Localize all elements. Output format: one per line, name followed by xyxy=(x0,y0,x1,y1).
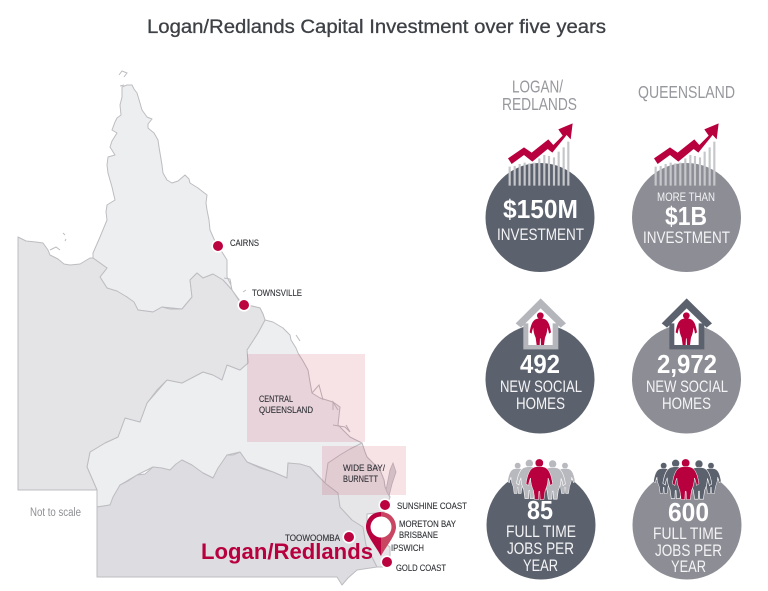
region: south west Queensland xyxy=(97,452,377,585)
column heading: Logan/Redlands: REDLANDS xyxy=(502,94,577,114)
location pin: Logan/Redlands xyxy=(366,512,396,556)
Fraser Island xyxy=(386,463,396,496)
note: not to scale: Not to scale xyxy=(30,507,81,519)
marker: Townsville xyxy=(238,288,302,311)
icon: house with person xyxy=(516,298,566,349)
caption: JOBS PER xyxy=(655,542,722,560)
stat: Queensland jobs xyxy=(632,459,742,580)
circle xyxy=(486,324,594,434)
stat: Logan/Redlands investment xyxy=(486,123,594,272)
circle xyxy=(632,163,741,272)
caption: JOBS PER xyxy=(507,540,574,558)
label: Central Queensland xyxy=(259,394,313,416)
circle xyxy=(486,163,594,272)
caption: YEAR xyxy=(523,557,558,575)
stat: Logan/Redlands jobs xyxy=(486,459,596,580)
label: Central Queensland: QUEENSLAND xyxy=(259,405,313,416)
label: Wide Bay/Burnett: BURNETT xyxy=(343,474,378,485)
circle xyxy=(486,470,596,580)
column heading: Queensland: QUEENSLAND xyxy=(638,82,735,102)
icon: group of people xyxy=(654,459,721,500)
column heading: Logan/Redlands: LOGAN/ xyxy=(512,76,563,96)
value: $150M xyxy=(503,196,578,224)
caption xyxy=(653,525,723,576)
marker: Cairns xyxy=(212,238,259,252)
caption: INVESTMENT xyxy=(643,229,730,247)
marker: Sunshine Coast xyxy=(379,499,467,512)
label: Central Queensland: CENTRAL xyxy=(259,394,293,405)
label: Moreton Bay, Brisbane, Ipswich: MORETON BAY xyxy=(399,519,457,530)
highlight: Wide Bay/Burnett area xyxy=(322,446,406,495)
stat: Queensland social homes xyxy=(632,298,741,434)
map of Queensland xyxy=(18,71,467,585)
caption: HOMES xyxy=(662,395,711,413)
label: Logan/Redlands: Logan/Redlands xyxy=(201,539,373,564)
caption: FULL TIME xyxy=(506,523,576,541)
label: Wide Bay/Burnett xyxy=(343,463,385,485)
qualifier: MORE THAN xyxy=(657,192,715,204)
marker: Toowoomba: TOOWOOMBA xyxy=(285,533,341,544)
circle xyxy=(632,324,741,434)
marker: Cairns: CAIRNS xyxy=(230,238,259,249)
stat: Logan/Redlands social homes xyxy=(486,298,594,434)
value: 492 xyxy=(520,351,560,379)
caption: NEW SOCIAL xyxy=(500,378,582,396)
caption: YEAR xyxy=(671,558,706,576)
icon: house with person xyxy=(662,298,712,349)
title: Logan/Redlands Capital Investment over five years xyxy=(147,17,606,38)
caption xyxy=(506,523,576,575)
marker: Sunshine Coast: SUNSHINE COAST xyxy=(397,501,467,512)
label: Moreton Bay, Brisbane, Ipswich xyxy=(391,519,457,554)
highlight: Central Queensland area xyxy=(247,354,365,442)
caption: FULL TIME xyxy=(653,525,723,543)
column heading: Logan/Redlands xyxy=(502,76,577,114)
marker: Townsville: TOWNSVILLE xyxy=(252,288,302,299)
region: northern Queensland xyxy=(87,85,390,527)
caption xyxy=(646,378,728,413)
caption xyxy=(500,378,582,413)
stat: Queensland investment xyxy=(632,123,741,272)
value: 600 xyxy=(668,499,709,527)
icon: rising bar chart with arrow xyxy=(508,123,573,186)
value: 85 xyxy=(527,497,553,525)
region: north west Queensland xyxy=(18,237,265,490)
caption: HOMES xyxy=(516,395,565,413)
label: Moreton Bay, Brisbane, Ipswich: IPSWICH xyxy=(391,543,424,554)
small coastal islands xyxy=(50,71,350,432)
label: Wide Bay/Burnett: WIDE BAY/ xyxy=(343,463,385,474)
icon: group of people xyxy=(508,459,575,500)
value: 2,972 xyxy=(657,351,717,379)
value: $1B xyxy=(665,203,707,231)
label: Moreton Bay, Brisbane, Ipswich: BRISBANE xyxy=(399,530,438,541)
marker: Gold Coast: GOLD COAST xyxy=(396,563,446,574)
marker: Gold Coast xyxy=(381,556,446,574)
caption: INVESTMENT xyxy=(497,226,584,244)
region: wide bay south east xyxy=(325,443,390,567)
circle xyxy=(632,470,742,580)
icon: rising bar chart with arrow xyxy=(654,123,719,186)
caption: NEW SOCIAL xyxy=(646,378,728,396)
